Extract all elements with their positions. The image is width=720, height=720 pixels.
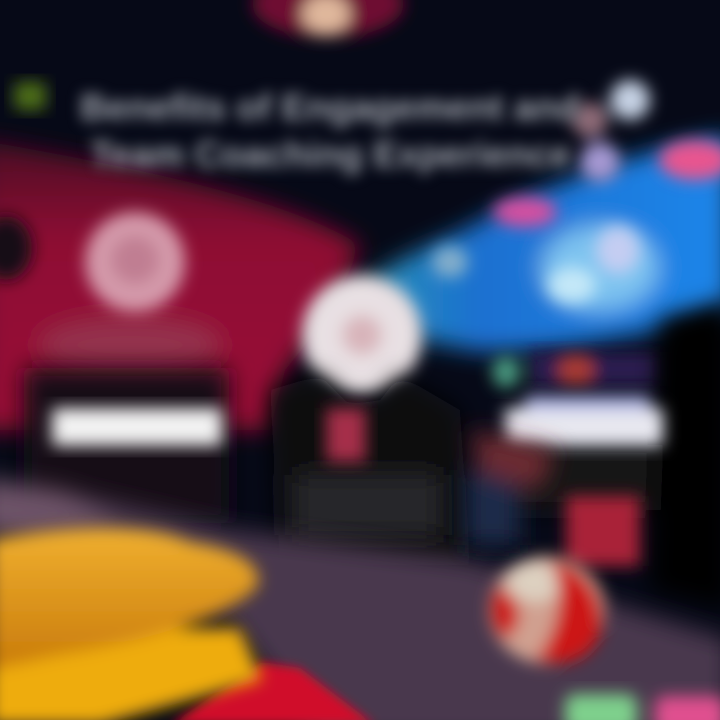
panel: left dark card <box>24 368 229 523</box>
panel: red curved backdrop <box>0 140 360 430</box>
icon: bottom chips <box>565 694 720 720</box>
block: red rectangle right <box>566 496 640 566</box>
icon: screen highlights <box>432 140 720 303</box>
shape: stacked yellow forms <box>0 528 262 720</box>
panel: purple table surface <box>0 478 720 720</box>
icon: center white circle <box>302 275 422 395</box>
button: left white label <box>52 408 222 446</box>
icon: left pink circle <box>85 212 185 312</box>
shape: red floor <box>170 662 375 720</box>
panel: blue screen <box>370 135 720 352</box>
icon: top right light cluster <box>572 80 650 182</box>
icon: green square <box>14 82 46 110</box>
title <box>72 85 586 182</box>
panel: right dark card <box>490 300 720 610</box>
button: right white label <box>505 396 663 446</box>
title: Team Coaching Experience <box>90 134 571 175</box>
shape: dark figure legs <box>465 430 555 545</box>
icon: red connector <box>326 408 366 462</box>
panel: dark lower center card <box>270 375 470 565</box>
icon: top emblem <box>252 0 404 38</box>
title: Benefits of Engagement and <box>80 87 580 128</box>
icon: red and white ball <box>489 556 605 664</box>
icon: dark circle left <box>0 216 32 280</box>
panel: right strip under screen <box>492 352 660 388</box>
